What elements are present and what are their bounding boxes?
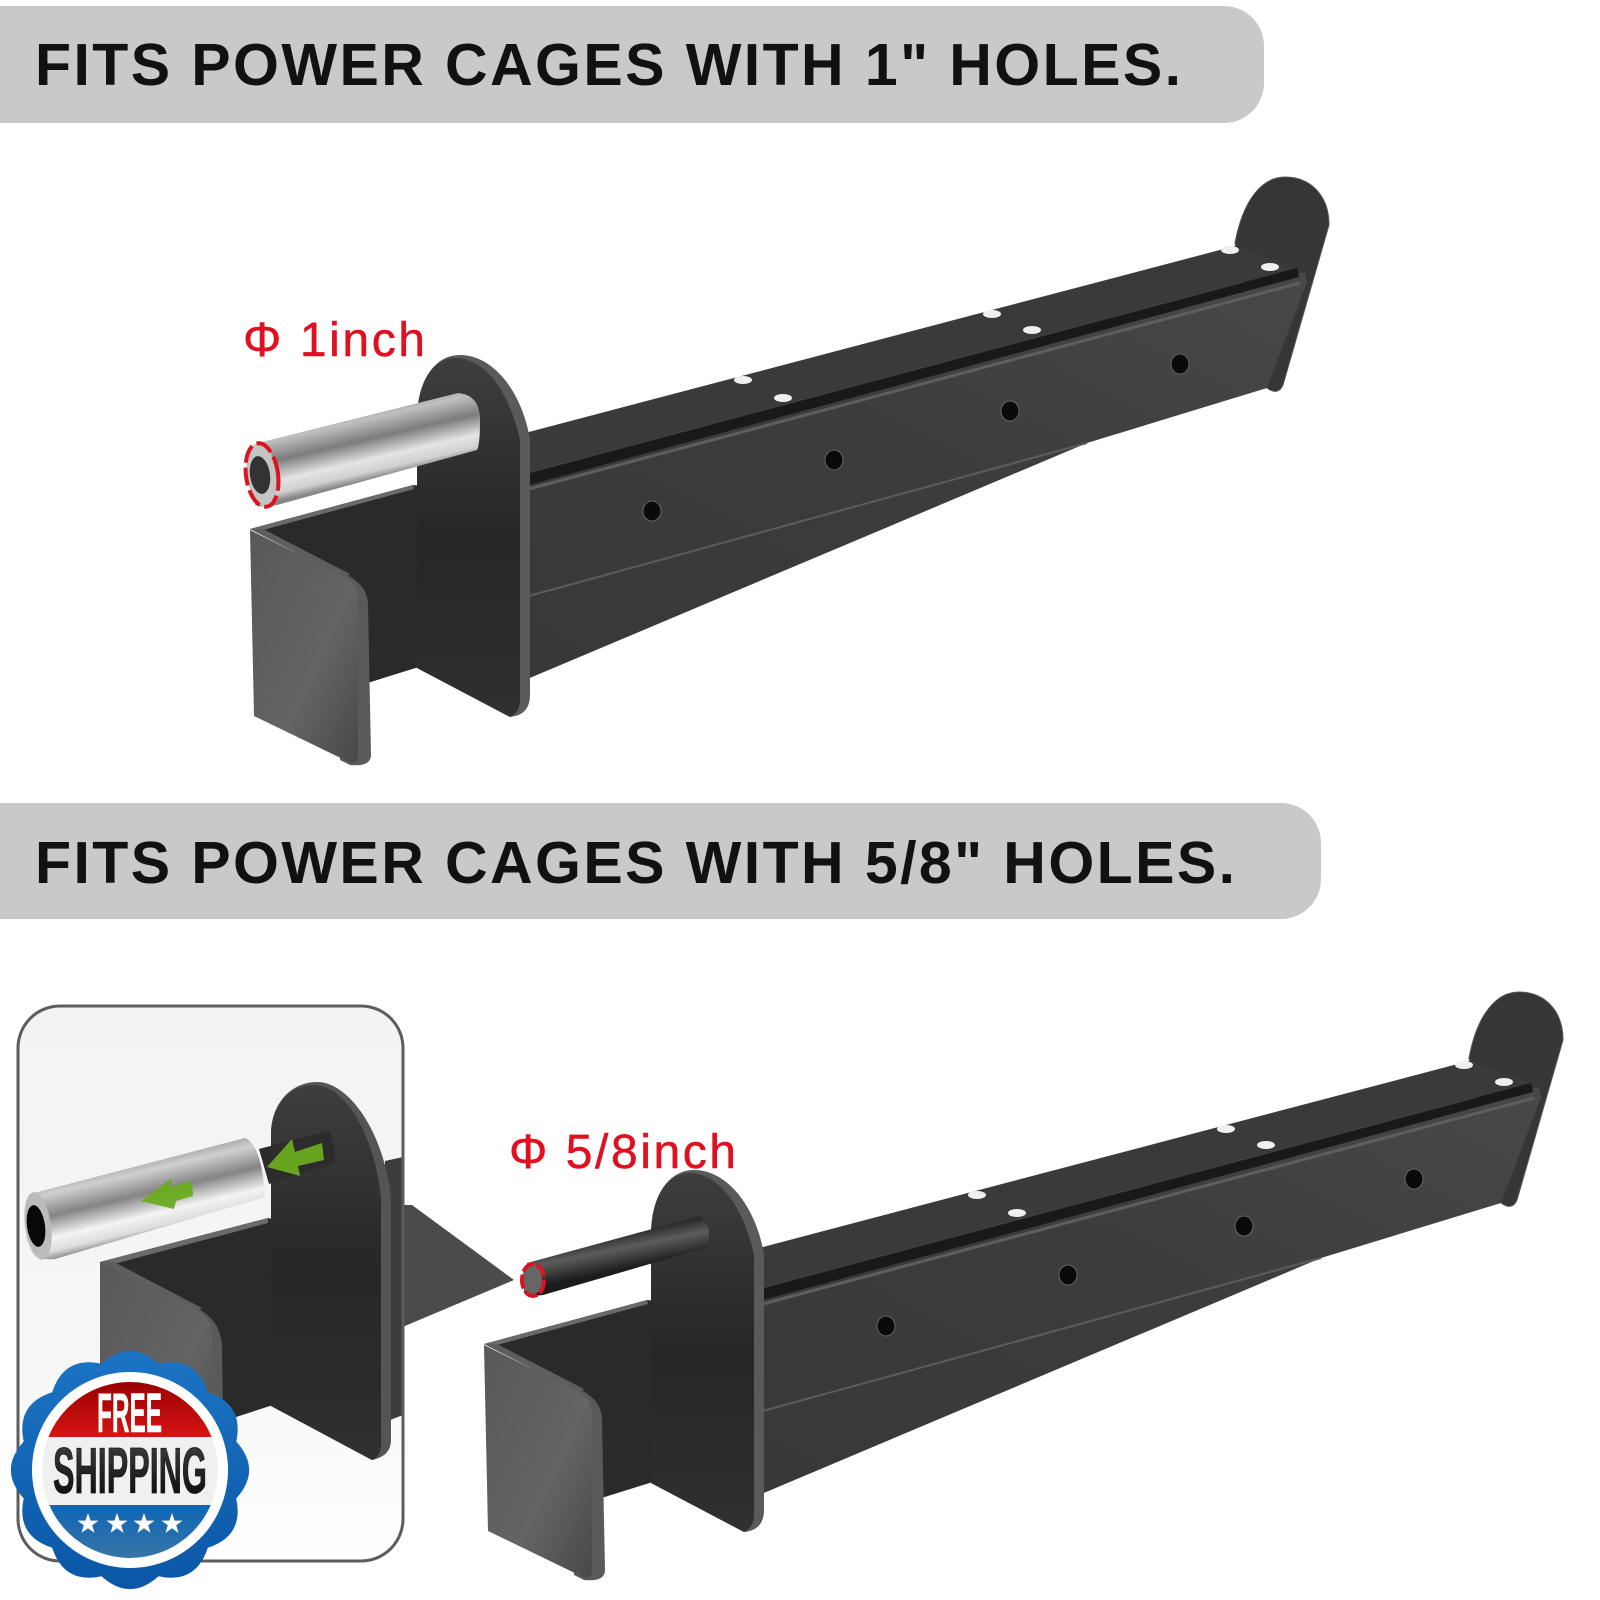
main plate bbox=[651, 1170, 764, 1532]
spar side bbox=[759, 1087, 1541, 1495]
U bracket back wall bbox=[250, 485, 422, 690]
badge stars bbox=[78, 1513, 182, 1533]
U bracket back wall bbox=[484, 1300, 656, 1505]
scalloped blue seal bbox=[11, 1351, 249, 1589]
white bolts bbox=[968, 1061, 1513, 1217]
inset panel: pin sleeve detail bbox=[18, 1006, 403, 1561]
rack spar: 1 inch version bbox=[242, 177, 1329, 765]
badge: free shipping: FREE bbox=[97, 1381, 162, 1444]
bracket back wall bbox=[100, 1218, 276, 1432]
holes bbox=[877, 1169, 1423, 1336]
holes bbox=[643, 354, 1189, 521]
white bolts bbox=[734, 246, 1279, 402]
green arrow on pin bbox=[267, 1139, 324, 1176]
heading bar: 5/8 inch holes bbox=[0, 803, 1321, 919]
U bracket front face bbox=[574, 1389, 605, 1580]
inset plate bbox=[271, 1082, 391, 1460]
label: 5/8 inch diameter: Φ 5/8inch bbox=[509, 1126, 736, 1179]
label: 1 inch diameter: Φ 1inch bbox=[243, 314, 425, 367]
heading bar: 5/8 inch holes: FITS POWER CAGES WITH 5/8" HOLES. bbox=[35, 830, 1235, 896]
arm behind plate bbox=[385, 1157, 403, 1422]
bracket front face bbox=[198, 1310, 223, 1400]
inner pin bbox=[259, 1131, 334, 1184]
heading bar: 1 inch holes: FITS POWER CAGES WITH 1" HOLES. bbox=[35, 32, 1181, 98]
far end plate bbox=[1469, 992, 1563, 1206]
red dashed diameter ring bbox=[522, 1264, 544, 1296]
badge: free shipping: SHIPPING bbox=[53, 1434, 207, 1507]
badge: free shipping bbox=[11, 1351, 249, 1589]
red dashed diameter ring bbox=[242, 441, 282, 509]
green arrow on sleeve bbox=[141, 1178, 193, 1209]
rack spar: 5/8 inch version bbox=[484, 992, 1563, 1580]
sleeve tube bbox=[26, 1138, 265, 1259]
spar side bbox=[525, 272, 1307, 680]
U bracket front face bbox=[340, 574, 371, 765]
black pin bbox=[522, 1216, 709, 1296]
far end plate bbox=[1235, 177, 1329, 391]
main plate bbox=[417, 355, 530, 717]
heading bar: 1 inch holes bbox=[0, 6, 1264, 123]
callout pointer triangle bbox=[393, 1205, 514, 1331]
spar top face bbox=[759, 1061, 1531, 1289]
steel tube bbox=[255, 393, 480, 506]
spar top face bbox=[525, 246, 1297, 474]
